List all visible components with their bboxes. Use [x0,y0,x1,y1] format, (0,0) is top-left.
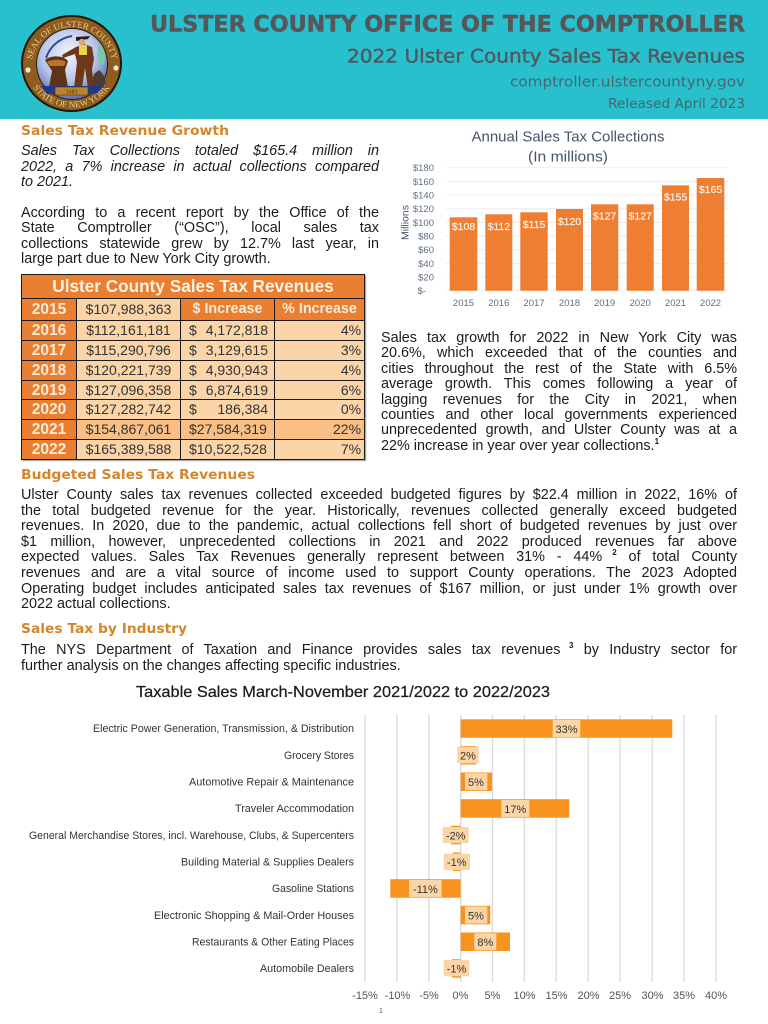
icon: county seal: 1683 [66,90,78,96]
text block: budgeted revenues: the total budgeted revenue for the year. Historically, revenues collected generally exceed budgeted [21,503,737,519]
table title: $10,522,528 [189,441,267,457]
bar value labels [409,720,580,976]
text block: collections summary: to 2021. [21,174,73,190]
heading: sales tax revenue growth: Sales Tax Revenue Growth [21,124,229,139]
x axis labels: 2015 [453,298,474,309]
bar value labels: -11% [413,884,438,896]
x axis labels: 10% [513,990,536,1002]
table title: $ [189,382,197,398]
table title: Ulster County Sales Tax Revenues [52,276,334,296]
category labels: Automobile Dealers [260,963,354,975]
chart title: (In millions) [528,148,608,166]
text block: New York City comparison: 20.6%, which exceeded that of the counties and [381,345,737,361]
heading: budgeted sales tax revenues: Budgeted Sales Tax Revenues [21,468,255,483]
bar value labels: 5% [468,910,484,922]
text block: New York City comparison: counties and other local governments experienced [381,407,737,423]
y axis labels [413,163,434,297]
text block: OSC report: State Comptroller (“OSC”), local sales tax [21,220,379,236]
chart title: Taxable Sales March-November 2021/2022 to 2022/2023 [136,684,550,701]
text block: budgeted revenues: revenues and are a vital source of income used to support County operations. The 2023 Adopted [21,565,737,581]
category labels: General Merchandise Stores, incl. Warehouse, Clubs, & Supercenters [29,830,354,842]
x axis labels: -5% [419,990,439,1002]
y axis labels: $40 [418,259,434,270]
bar value labels: 17% [504,804,527,816]
x axis labels: 15% [545,990,568,1002]
bar value labels: -1% [447,964,466,976]
table title: 6,874,619 [206,382,268,398]
y axis labels: $20 [418,272,434,284]
table title: 0% [341,401,361,417]
x axis labels: -10% [385,990,411,1002]
website: comptroller.ulstercountyny.gov [510,74,745,90]
table title: 2021 [32,421,66,438]
table title: $ [189,322,197,338]
bar value labels: 5% [468,777,484,789]
table title: $ [189,362,197,378]
category labels: Gasoline Stations [272,883,354,895]
bar value labels: $165 [699,184,722,196]
x axis labels: 2019 [594,298,615,309]
bar value labels: 2% [460,750,476,762]
text block: industry intro [21,641,737,674]
table title: $154,867,061 [86,421,171,437]
text block: OSC report [21,205,379,267]
text block: New York City comparison: Sales tax growth for 2022 in New York City was [381,330,737,346]
x axis labels: 20% [577,990,600,1002]
subtitle: 2022 Ulster County Sales Tax Revenues [347,46,745,68]
text block: New York City comparison: 22% increase in year over year collections.1 [381,437,659,454]
chart title [472,128,664,166]
chart title: Annual Sales Tax Collections [472,128,664,146]
y axis labels: $60 [418,245,434,256]
text block: OSC report: large part due to New York City growth. [21,251,271,267]
text block: New York City comparison: lagging revenues for the City in 2021, when [381,392,737,408]
table title: % Increase [282,301,357,317]
table title: $ [189,342,197,358]
table title: 2020 [32,401,66,418]
x axis labels: 40% [705,990,727,1002]
x axis labels: 0% [453,990,469,1002]
x axis labels: 2016 [488,298,509,309]
table title: 2017 [32,342,66,359]
text block: New York City comparison: unprecedented growth, and Ulster County was at a [381,422,737,438]
table title: 2019 [32,382,66,398]
bar chart: taxable sales by industry [29,684,727,1002]
table title: $165,389,588 [86,441,171,457]
x axis labels [352,990,727,1002]
table title: 4,172,818 [206,322,268,338]
x axis labels: -15% [352,990,378,1002]
x axis labels: 25% [609,990,631,1002]
table title: 3,129,615 [206,342,268,358]
table title: $112,161,181 [86,322,171,338]
bar value labels: $120 [558,216,581,228]
text block: collections summary [20,143,380,190]
text block: budgeted revenues: expected values. Sales Tax Revenues generally represent between 31% - 44% 2 of total County [21,548,737,565]
x axis labels: 2022 [700,298,721,309]
header banner [0,0,768,119]
table title [22,275,364,459]
category labels [29,723,354,975]
text block: New York City comparison: average growth. This comes following a year of [381,376,737,392]
table title: 22% [333,421,361,437]
release date: Released April 2023 [608,97,745,112]
y axis labels: $100 [413,218,434,229]
bar value labels: $115 [523,219,545,231]
text block: budgeted revenues: revenues. In 2020, due to the pandemic, actual collections fell short of budgeted revenues by just over [21,518,737,534]
table title: $107,988,363 [86,301,171,317]
y axis labels: $- [418,286,426,297]
bar value labels: $108 [452,221,475,233]
bar value labels: 33% [555,724,578,736]
bar value labels: $112 [488,221,510,233]
bars [450,178,724,291]
category labels: Automotive Repair & Maintenance [189,776,354,788]
category labels: Electric Power Generation, Transmission, & Distribution [93,723,354,735]
bar value labels: -1% [447,857,467,869]
bar value labels: -2% [446,830,466,842]
table title: 2016 [32,322,66,339]
bar chart: annual sales tax collections [400,128,728,309]
title: ULSTER COUNTY OFFICE OF THE COMPTROLLER [150,12,745,38]
table title: $27,584,319 [189,421,267,437]
table title: 2018 [32,362,66,379]
text block: collections summary: Sales Tax Collections totaled $165.4 million in [21,143,379,159]
table title: $127,282,742 [86,401,171,417]
text block: budgeted revenues: 2022 actual collections. [21,596,171,612]
table title: 4,930,943 [206,362,268,378]
text block: New York City comparison: cities throughout the rest of the State with 6.5% [381,361,737,377]
category labels: Restaurants & Other Eating Places [192,936,354,948]
text block: OSC report: According to a recent report by the Office of the [21,205,379,221]
text block: budgeted revenues: $1 million, however, unprecedented collections in 2021 and 2022 produced revenues far above [21,534,737,550]
text block: industry intro: The NYS Department of Taxation and Finance provides sales tax revenues 3 by Industry sector for [21,641,737,658]
y axis labels: $160 [413,177,434,188]
table title: 2015 [32,301,66,318]
table title: $120,221,739 [86,362,171,378]
table title: 186,384 [217,401,268,417]
icon: county seal: STATE OF NEW YORK [34,84,110,108]
bars [390,719,672,978]
table title: 2022 [32,441,66,458]
bar value labels: $127 [593,210,616,222]
heading: sales tax by industry: Sales Tax by Industry [21,622,187,637]
x axis labels: 30% [641,990,664,1002]
bar value labels [452,184,722,233]
bar value labels: 8% [477,937,493,949]
x axis labels: 2017 [523,298,545,309]
category labels: Building Material & Supplies Dealers [181,856,354,868]
table title: 6% [341,382,361,398]
table title: 7% [341,441,361,457]
text block: industry intro: further analysis on the changes affecting specific industries. [21,658,401,674]
table title: 4% [341,362,361,378]
text block: budgeted revenues: Ulster County sales tax revenues collected exceeded budgeted figures by $22.4 million in 2022, 16% of [21,487,737,503]
table title: $127,096,358 [86,382,171,398]
text block: OSC report: collections statewide grew by 12.7% last year, in [21,236,379,252]
page number: 1 [379,1008,383,1015]
category labels: Traveler Accommodation [235,803,354,815]
text block: New York City comparison [381,330,738,454]
bar value labels: $155 [664,192,687,204]
category labels: Grocery Stores [284,750,354,762]
y axis labels: $180 [413,163,434,174]
x axis labels: 2018 [559,298,580,309]
category labels: Electronic Shopping & Mail-Order Houses [154,910,354,922]
bar value labels: $127 [629,210,652,222]
x axis labels: 2020 [630,298,651,309]
x axis labels: 2021 [665,298,686,309]
x axis labels: 35% [673,990,695,1002]
x axis labels [453,298,721,309]
y axis labels: $140 [413,190,434,202]
y axis labels: $80 [418,232,434,242]
text block: collections summary: 2022, a 7% increase in actual collections compared [21,158,379,174]
table title: $ [189,401,197,417]
table title: $115,290,796 [86,342,171,358]
table title: 3% [341,342,361,358]
x axis labels: 5% [485,990,501,1002]
icon: county seal: SEAL OF ULSTER COUNTY [26,21,118,60]
table title: 4% [341,322,361,338]
text block: budgeted revenues: Operating budget includes anticipated sales tax revenues of $167 million, or just under 1% growth over [21,581,737,597]
text block: budgeted revenues [21,487,738,612]
icon: county seal [21,15,122,112]
table: sales tax revenues [21,274,365,460]
y axis labels: $120 [413,204,434,215]
table title: $ Increase [193,301,262,317]
